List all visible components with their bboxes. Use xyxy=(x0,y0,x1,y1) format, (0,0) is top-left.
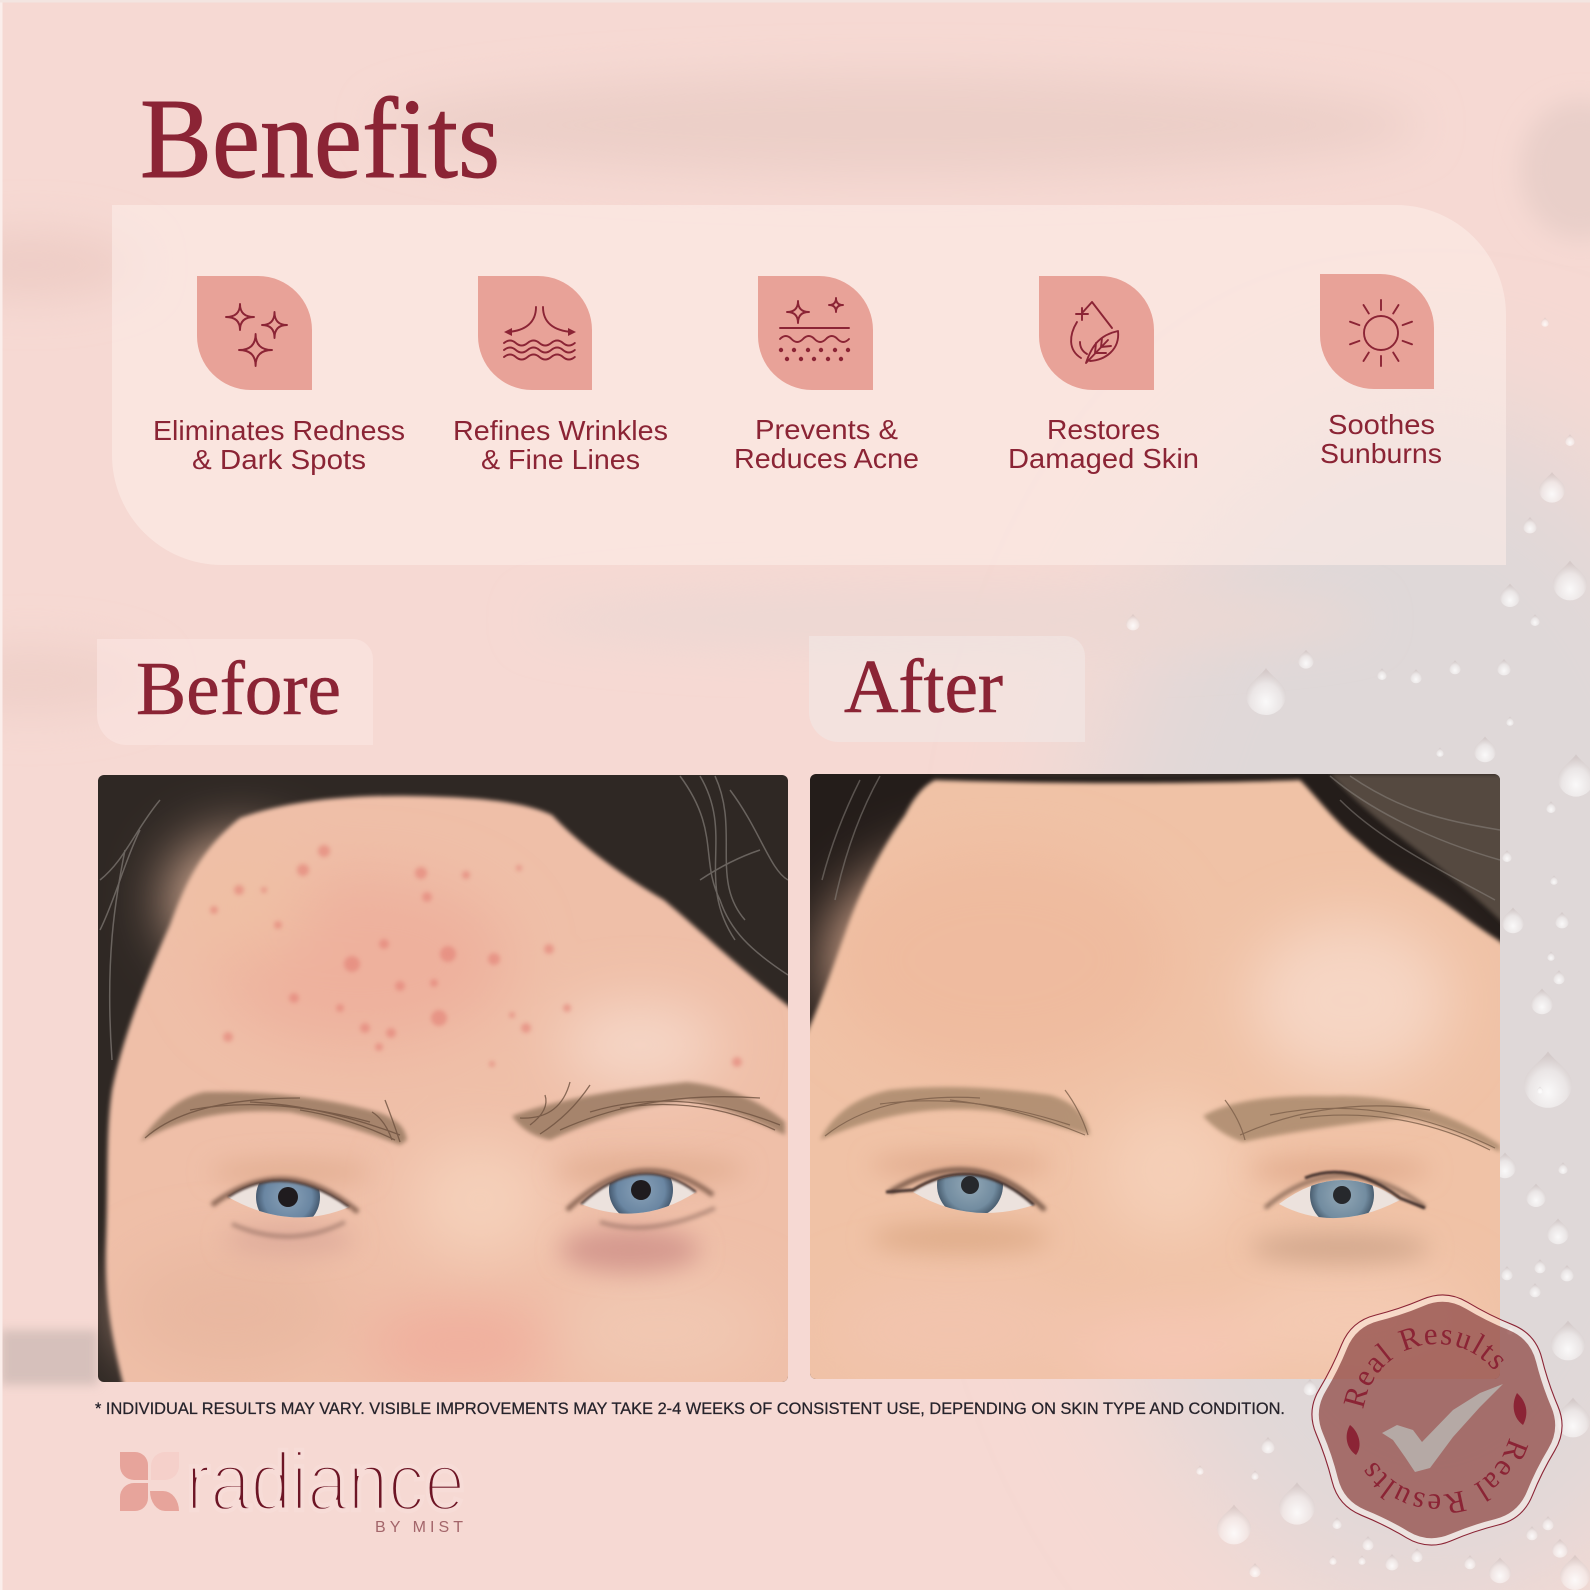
label: refines wrinkles: & Fine Lines xyxy=(481,444,640,475)
badge: real results seal: Real Results xyxy=(1364,1438,1528,1513)
heading: after xyxy=(809,636,1085,742)
water droplets xyxy=(1126,317,1590,1590)
icon: wrinkle lines with arrows xyxy=(478,276,592,390)
tagline: BY MIST xyxy=(375,1519,463,1536)
label: refines wrinkles: Refines Wrinkles xyxy=(453,415,668,446)
skin xyxy=(106,796,800,1400)
eyebrows xyxy=(140,1082,785,1145)
skin xyxy=(800,780,1510,1400)
acne spots xyxy=(210,845,742,1067)
check mark xyxy=(1382,1384,1503,1472)
label: soothes sunburns: Sunburns xyxy=(1320,438,1442,469)
label: restores skin: Restores xyxy=(1047,414,1160,445)
seal text: Real Results xyxy=(1344,1328,1504,1408)
icon: sparkles xyxy=(197,276,312,390)
eyes xyxy=(212,1158,715,1237)
heading: before xyxy=(97,639,373,745)
photo: before xyxy=(98,775,800,1400)
hair strands xyxy=(100,776,788,1060)
icon: sun xyxy=(1320,274,1434,389)
label: eliminates redness: & Dark Spots xyxy=(192,444,366,475)
icon: drop and leaf xyxy=(1039,276,1154,390)
label: prevents acne: Prevents & xyxy=(755,414,898,445)
label: soothes sunburns: Soothes xyxy=(1328,409,1435,440)
label: restores skin: Damaged Skin xyxy=(1008,443,1199,474)
eyebrows xyxy=(820,1087,1500,1152)
label: eliminates redness: Eliminates Redness xyxy=(153,415,405,446)
wordmark: radiance xyxy=(186,1435,465,1528)
title: benefits: Benefits xyxy=(140,75,500,202)
heading: after: After xyxy=(844,645,1003,729)
panel: benefits xyxy=(112,205,1506,565)
logo: radiance by mist xyxy=(120,1435,465,1536)
seal leaves xyxy=(1347,1393,1526,1455)
icon: skin layers xyxy=(758,276,873,390)
label: prevents acne: Reduces Acne xyxy=(734,443,919,474)
eyes xyxy=(884,1164,1428,1218)
heading: before: Before xyxy=(136,647,341,731)
badge: real results seal xyxy=(1311,1294,1563,1546)
hair strands xyxy=(822,776,1500,900)
logo mark: four petals xyxy=(120,1452,179,1511)
disclaimer: * INDIVIDUAL RESULTS MAY VARY. VISIBLE IMPROVEMENTS MAY TAKE 2-4 WEEKS OF CONSISTENT USE, DEPENDING ON SKIN TYPE AND CONDITION. xyxy=(95,1400,1285,1418)
photo: after xyxy=(800,774,1510,1400)
